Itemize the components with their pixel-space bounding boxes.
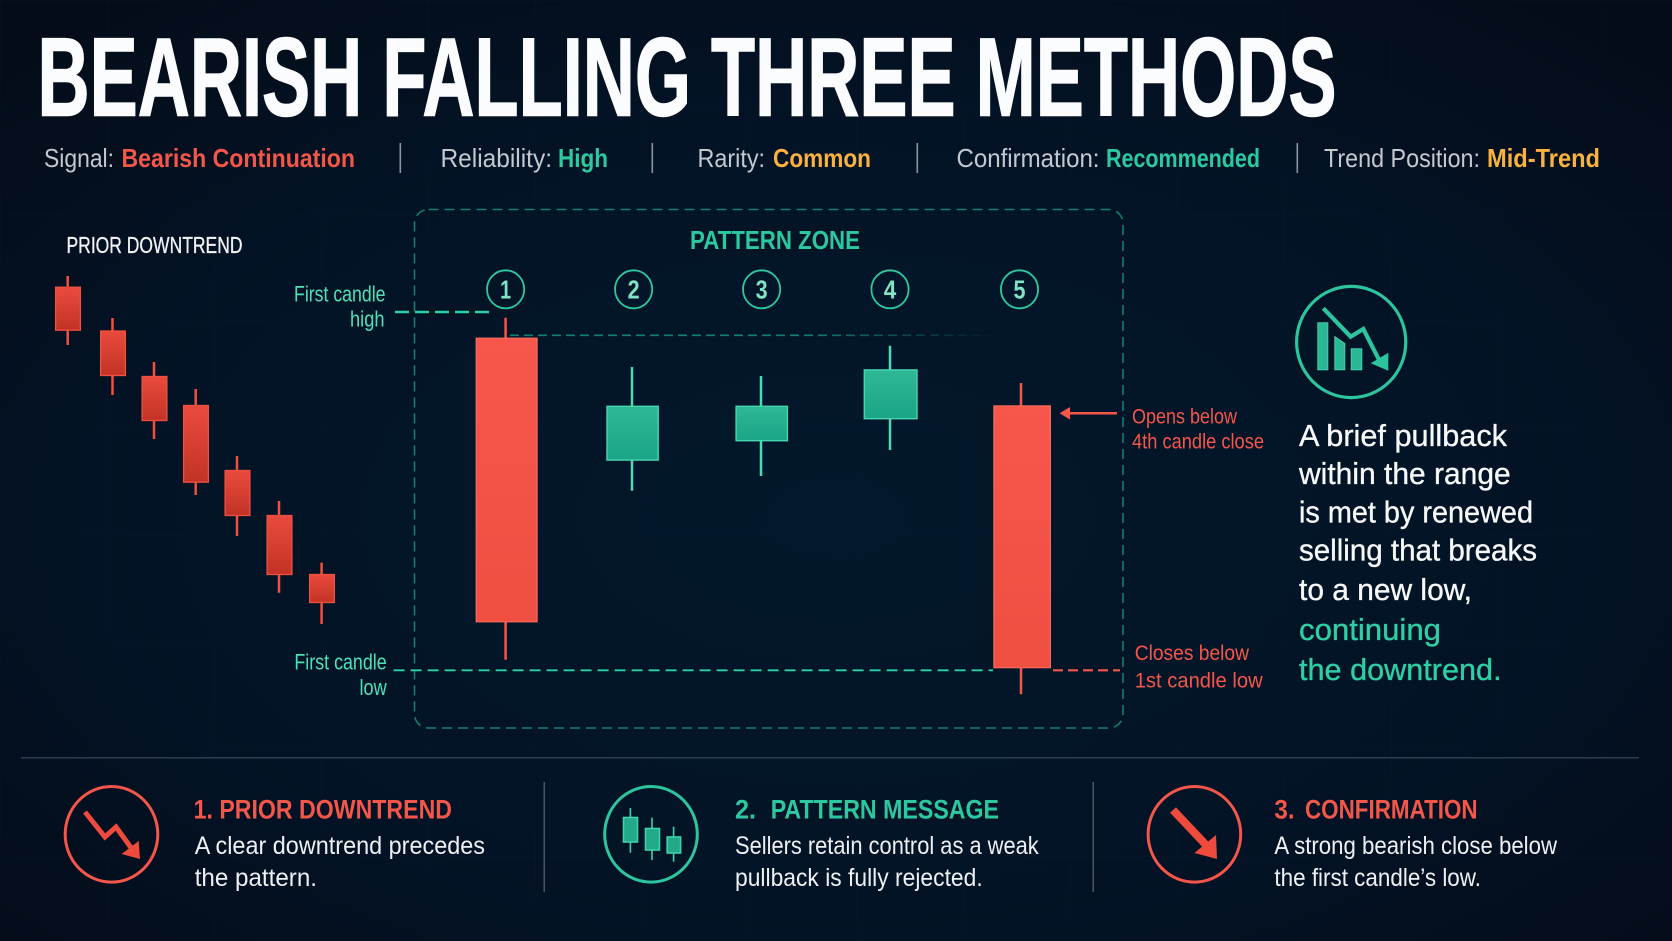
description [1274,832,1558,892]
pattern zone heading: PATTERN ZONE [690,225,860,255]
description: the pattern. [195,864,317,892]
candle 2 bullish [607,367,658,491]
attribute: rarity: Rarity: [698,143,765,173]
attribute: confirmation: Recommended [1106,143,1260,173]
attribute: rarity [698,143,871,173]
attribute bar [44,143,1600,173]
candle 5 bearish [994,383,1050,694]
heading: PATTERN MESSAGE [771,795,999,825]
chart: prior downtrend candles [56,276,334,624]
icon: down arrow [1148,786,1241,882]
heading: 3. [1274,795,1295,825]
description: Sellers retain control as a weak [735,832,1039,860]
candle number badges: 1 [500,274,511,304]
label: first candle high: First candle [294,282,386,307]
icon: falling chart [1297,286,1406,398]
attribute: trend position: Mid-Trend [1487,143,1600,173]
description [735,832,1039,892]
candle number badges: 2 [628,274,640,304]
label: first candle low: low [360,675,387,700]
label: closes below: Closes below [1135,642,1250,665]
icon: candlesticks [605,786,697,882]
candle 4 bullish [864,346,917,450]
description: pullback is fully rejected. [735,864,983,892]
panel: prior downtrend [65,786,485,892]
first candle high line [394,311,489,313]
description: A strong bearish close below [1274,832,1558,860]
candle 1 bearish [476,318,537,660]
description [195,832,485,892]
icon: zigzag down arrow [65,786,158,882]
label: opens below: Opens below [1132,405,1238,428]
first candle body top line [510,334,1000,336]
panel: pattern message [605,786,1039,892]
explanation text: A brief pullback [1299,418,1507,453]
first candle low line [394,669,993,671]
attribute: rarity: Common [773,143,871,173]
attribute: confirmation [956,143,1260,173]
arrow: opens below [1060,407,1117,420]
panel: confirmation [1148,786,1558,892]
pattern zone frame [414,210,1123,728]
label: opens below: 4th candle close [1132,431,1264,454]
attribute: signal [44,143,355,173]
explanation text: the downtrend. [1299,652,1502,687]
explanation text: to a new low, [1299,572,1472,607]
explanation text [1298,418,1537,687]
candle number badges: 3 [756,274,768,304]
label: first candle high [294,282,386,332]
label: first candle low [294,649,387,700]
heading: 1. PRIOR DOWNTREND [194,795,452,825]
attribute: signal: Signal: [44,143,114,173]
prior downtrend heading: PRIOR DOWNTREND [66,232,242,258]
candle number badges: 5 [1014,274,1026,304]
closes below red line [1053,669,1120,671]
attribute: reliability: Reliability: [440,143,552,173]
label: first candle high: high [350,307,384,332]
explanation text: is met by renewed [1299,494,1533,529]
attribute: signal: Bearish Continuation [122,143,355,173]
description: the first candle’s low. [1274,864,1481,892]
explanation text: selling that breaks [1299,533,1537,568]
candle 3 bullish [736,376,787,476]
attribute: trend position: Trend Position: [1324,143,1480,173]
attribute: trend position [1324,143,1600,173]
heading: 2. [735,795,756,825]
description: A clear downtrend precedes [195,832,485,860]
candle number badges: 4 [884,274,897,304]
label: closes below: 1st candle low [1135,670,1263,693]
label: opens below [1132,405,1264,454]
candle number badges [487,270,1038,308]
explanation text: continuing [1299,612,1441,647]
attribute: reliability: High [558,143,608,173]
label: first candle low: First candle [294,649,387,674]
label: closes below [1135,642,1263,693]
heading: CONFIRMATION [1305,795,1478,825]
attribute: confirmation: Confirmation: [956,143,1100,173]
explanation text: within the range [1298,456,1511,491]
